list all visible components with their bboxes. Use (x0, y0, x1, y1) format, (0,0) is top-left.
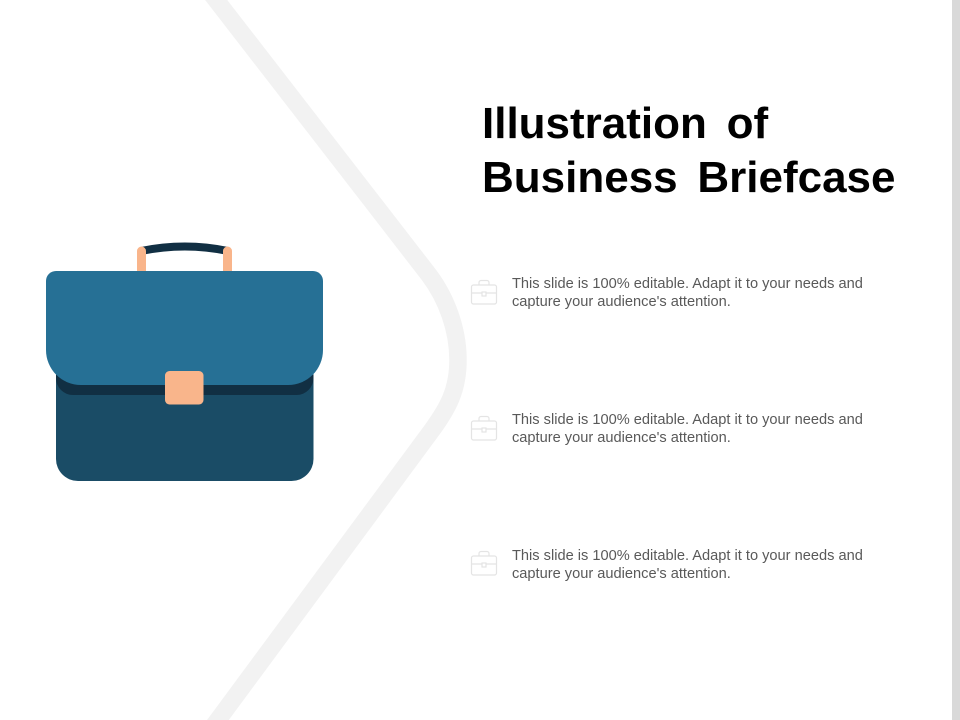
icon: small briefcase 3 (471, 551, 497, 576)
text block 3: This slide is 100% editable. Adapt it to your needs and (512, 548, 863, 564)
text block 1: capture your audience's attention. (512, 294, 731, 310)
flap shadow (56, 375, 314, 395)
icon: small briefcase 1 (471, 280, 497, 304)
flap (46, 271, 323, 385)
icon: small briefcase 2 (471, 416, 497, 440)
title: Illustration of (482, 99, 768, 148)
case body (56, 370, 314, 481)
text block 3 (512, 548, 863, 582)
text block 2 (512, 412, 863, 446)
clasp (165, 371, 204, 404)
title: Business Briefcase (482, 153, 896, 202)
text block 1 (512, 276, 863, 310)
title (482, 99, 896, 202)
text block 1: This slide is 100% editable. Adapt it to your needs and (512, 276, 863, 292)
text block 3: capture your audience's attention. (512, 566, 731, 582)
text block 2: This slide is 100% editable. Adapt it to your needs and (512, 412, 863, 428)
right edge bar (952, 0, 960, 720)
text block 2: capture your audience's attention. (512, 430, 731, 446)
handle (137, 246, 232, 272)
